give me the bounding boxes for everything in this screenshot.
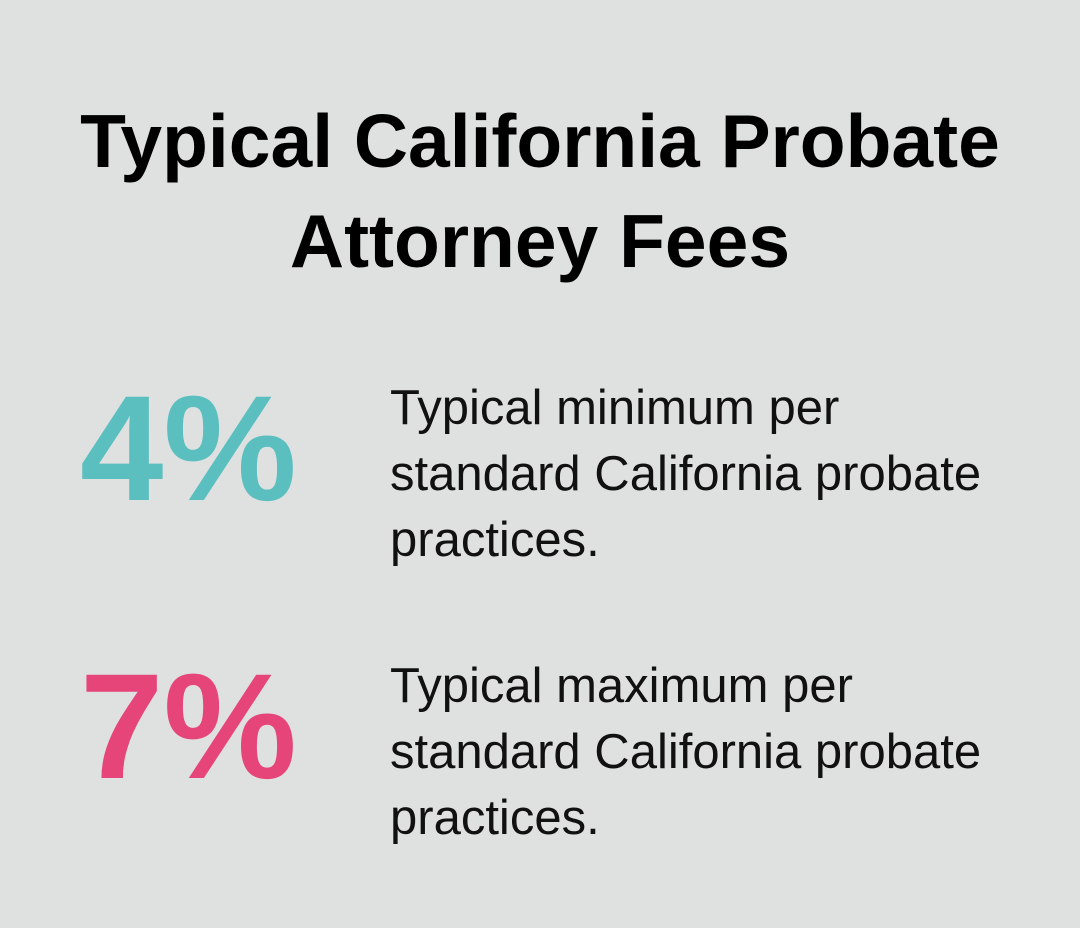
title: Attorney Fees bbox=[290, 199, 790, 283]
text maximum: practices. bbox=[390, 791, 600, 845]
text minimum bbox=[390, 381, 981, 567]
text minimum: standard California probate bbox=[390, 447, 981, 501]
title bbox=[80, 99, 1000, 283]
text maximum bbox=[390, 659, 981, 845]
text minimum: practices. bbox=[390, 513, 600, 567]
number 7%: 7% bbox=[80, 642, 297, 810]
text minimum: Typical minimum per bbox=[390, 381, 839, 435]
number 4%: 4% bbox=[80, 364, 297, 532]
text maximum: Typical maximum per bbox=[390, 659, 853, 713]
stat: minimum bbox=[80, 364, 981, 567]
stat: maximum bbox=[80, 642, 981, 845]
title: Typical California Probate bbox=[80, 99, 1000, 183]
text maximum: standard California probate bbox=[390, 725, 981, 779]
